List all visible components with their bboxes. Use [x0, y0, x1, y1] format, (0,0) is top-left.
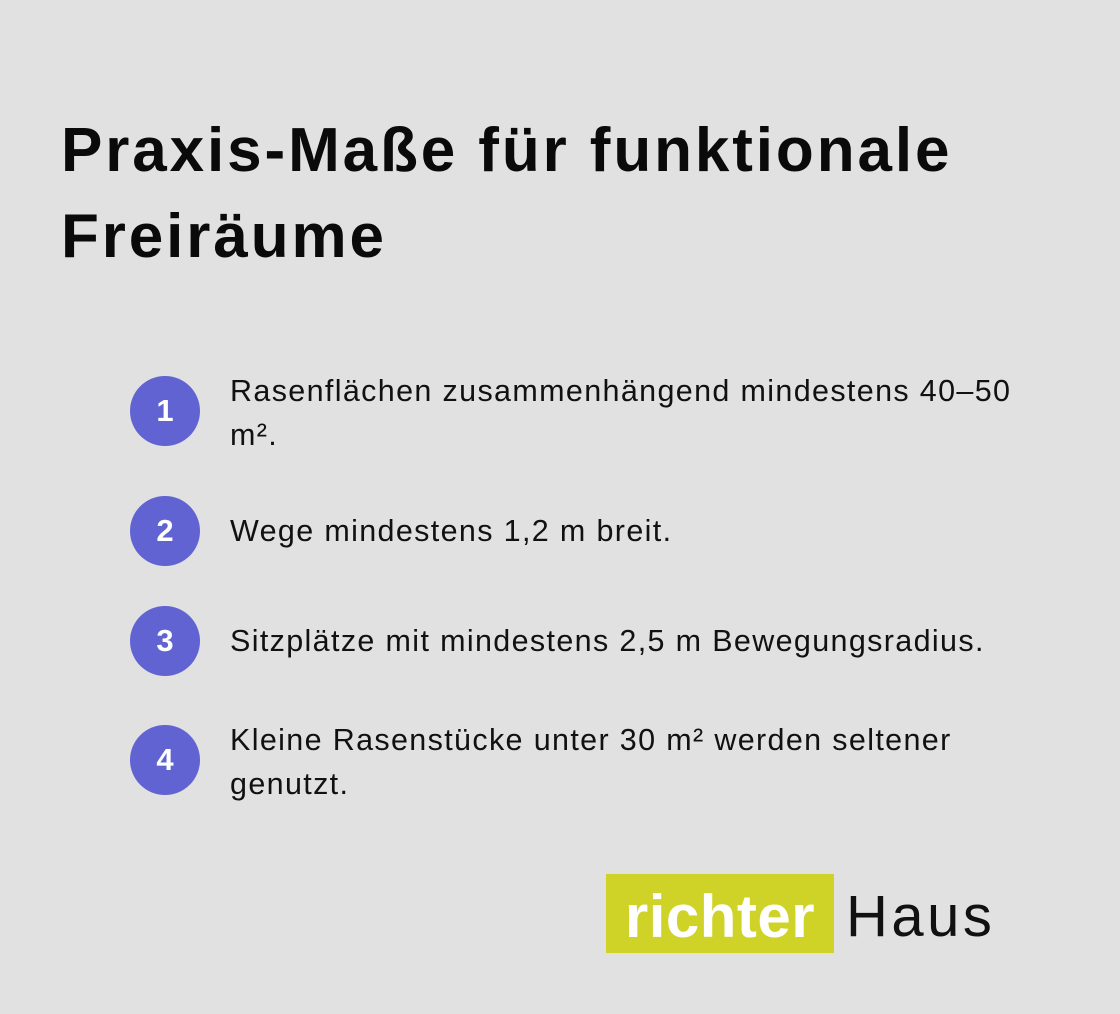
title: Freiräume	[61, 202, 387, 271]
badge 4: 4	[156, 742, 174, 777]
text 1: Rasenflächen zusammenhängend mindestens 40–50 m².	[230, 374, 1011, 452]
item 2	[130, 496, 672, 566]
item 1	[130, 374, 1011, 452]
badge 2: 2	[156, 513, 174, 548]
text 4: Kleine Rasenstücke unter 30 m² werden seltener genutzt.	[230, 723, 952, 801]
item 3	[130, 606, 985, 676]
badge 1: 1	[156, 393, 174, 428]
text 2: Wege mindestens 1,2 m breit.	[230, 514, 672, 548]
badge 3	[130, 606, 200, 676]
logo: Haus: Haus	[846, 884, 995, 949]
logo	[606, 874, 995, 953]
item 4	[130, 723, 952, 801]
badge 3: 3	[156, 623, 174, 658]
title: Praxis-Maße für funktionale	[61, 116, 952, 185]
text 3: Sitzplätze mit mindestens 2,5 m Bewegungsradius.	[230, 624, 985, 658]
badge 4	[130, 725, 200, 795]
badge 1	[130, 376, 200, 446]
title	[61, 116, 952, 271]
badge 2	[130, 496, 200, 566]
logo: richter box: richter	[625, 883, 815, 950]
